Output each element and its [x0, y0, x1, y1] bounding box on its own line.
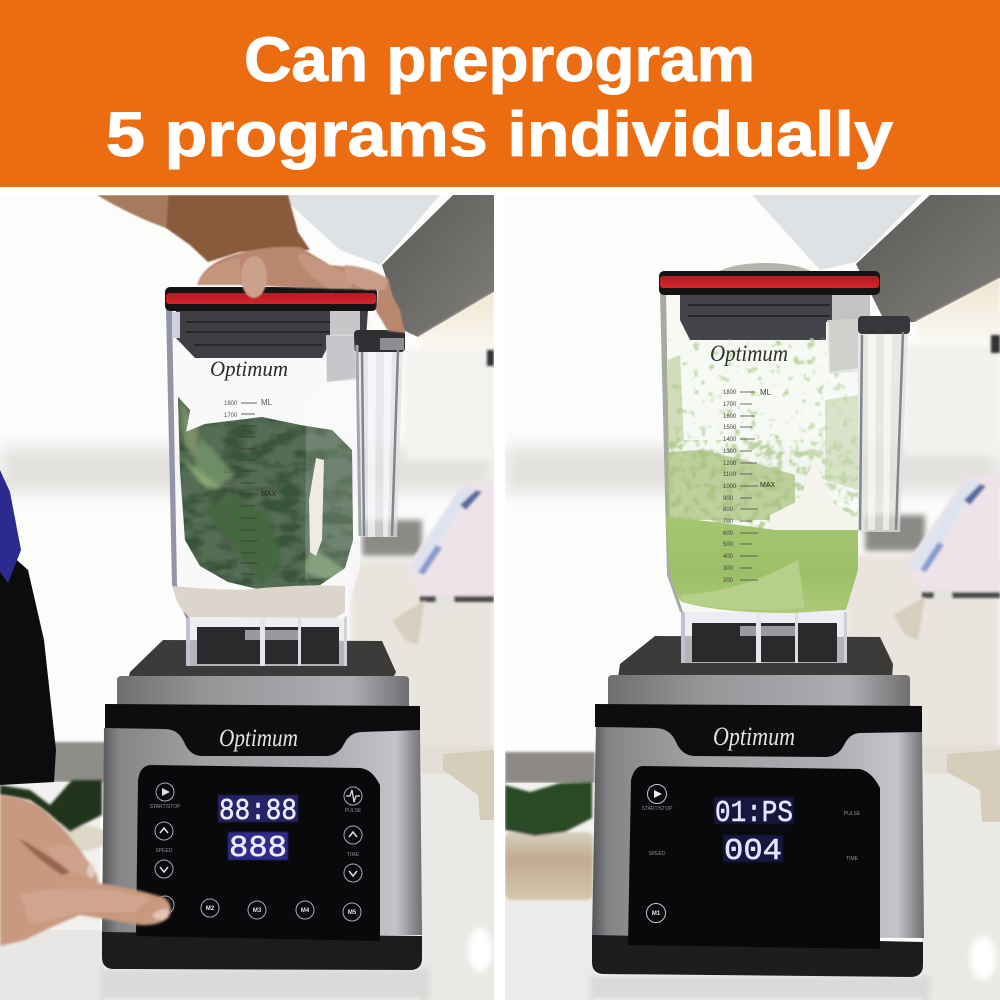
silver body [102, 728, 422, 935]
measuring scale: 1600 [723, 414, 737, 420]
green splatter [668, 338, 858, 530]
wooden board [443, 750, 494, 820]
buttons: M3 [253, 908, 262, 914]
logo on jar: Optimum [710, 341, 788, 366]
measuring scale: 1400 [723, 437, 737, 443]
jar inner corner highlight [305, 426, 353, 580]
measuring scale: MAX [760, 482, 776, 489]
display 1: 01:PS [715, 796, 793, 831]
red lid [659, 271, 880, 295]
lid cap [717, 263, 813, 272]
measuring scale: 800 [224, 516, 235, 522]
buttons [150, 783, 362, 921]
pressing hand [0, 795, 171, 946]
panel: left photo, before blending [0, 195, 494, 1000]
spinach leaves [178, 397, 353, 589]
base pad [129, 640, 396, 676]
measuring scale: 1700 [723, 402, 737, 408]
buttons: M2 [206, 906, 215, 912]
silver top [117, 676, 409, 706]
lit buttons and labels: START/STOP [642, 806, 673, 812]
display 2: 888 [229, 831, 287, 866]
measuring scale: 700 [224, 528, 235, 534]
lit buttons and labels: PULSE [844, 811, 861, 817]
measuring scale: 1800 [723, 390, 737, 396]
silver body [592, 727, 924, 938]
buttons: START/STOP [150, 804, 181, 810]
spinach plate [505, 782, 593, 900]
measuring scale: 800 [723, 507, 734, 513]
measuring scale: ML [760, 388, 772, 397]
blender: right [592, 263, 924, 977]
control base [592, 675, 924, 977]
wooden board [947, 750, 1000, 822]
jar body [165, 287, 405, 618]
jar inner corner highlight [806, 370, 858, 530]
measuring scale: ML [261, 398, 273, 407]
base pad [618, 636, 893, 678]
dark lid seal [680, 293, 870, 340]
base logo: Optimum [219, 725, 298, 752]
background appliance [392, 350, 494, 645]
measuring scale: 1200 [723, 461, 737, 467]
handle [326, 330, 405, 537]
measuring scale [224, 398, 276, 579]
lit buttons and labels: TIME [846, 856, 859, 862]
red lid [165, 287, 377, 311]
measuring scale: 1200 [224, 469, 238, 475]
kitchen background [505, 195, 1000, 1000]
measuring scale: 400 [224, 561, 235, 567]
lit buttons and labels: M1 [652, 911, 661, 917]
title: Can preprogram [244, 25, 755, 95]
buttons: M5 [348, 910, 357, 916]
header banner [0, 0, 1000, 187]
measuring scale [723, 388, 776, 584]
measuring scale: 400 [723, 554, 734, 560]
measuring scale: 300 [723, 566, 734, 572]
measuring scale: 1100 [224, 480, 238, 486]
buttons: SPEED [156, 848, 173, 854]
measuring scale: 500 [224, 552, 235, 558]
measuring scale: 1700 [224, 413, 238, 419]
measuring scale: 1400 [224, 447, 238, 453]
lit buttons and labels: SPEED [649, 851, 666, 857]
measuring scale: 600 [224, 540, 235, 546]
hand on lid [197, 247, 405, 333]
panel: right photo, after blending [505, 195, 1000, 1000]
foot [592, 935, 923, 977]
jar body [659, 263, 910, 613]
measuring scale: 200 [723, 578, 734, 584]
measuring scale: 1600 [224, 424, 238, 430]
measuring scale: 1800 [224, 401, 238, 407]
buttons: PULSE [345, 808, 362, 814]
measuring scale: 600 [723, 531, 734, 537]
black band and notch [595, 704, 922, 757]
measuring scale: 1000 [224, 492, 238, 498]
lit buttons and labels [642, 784, 861, 922]
control panel [628, 766, 880, 949]
measuring scale: 300 [224, 573, 235, 579]
milk layer [173, 585, 345, 618]
measuring scale: 1300 [224, 458, 238, 464]
title: 5 programs individually [106, 100, 893, 170]
background appliance [893, 335, 1000, 640]
measuring scale: 1100 [723, 472, 737, 478]
blender: left [0, 195, 422, 970]
buttons: TIME [347, 852, 360, 858]
measuring scale: MAX [261, 491, 276, 498]
control base [102, 676, 422, 970]
black band and notch [105, 704, 420, 756]
person torso [0, 470, 56, 785]
logo on jar: Optimum [210, 356, 288, 381]
arm [97, 195, 310, 262]
measuring scale: 700 [723, 519, 734, 525]
green liquid [666, 517, 858, 613]
kitchen background [0, 195, 494, 1000]
measuring scale: 1500 [224, 435, 238, 441]
spinach bowl [0, 780, 110, 852]
dark lid seal [172, 309, 368, 358]
measuring scale: 900 [723, 496, 734, 502]
foot [102, 932, 422, 970]
strip of reflection [309, 458, 324, 556]
display 1: 88:88 [219, 794, 297, 829]
measuring scale: 500 [723, 542, 734, 548]
handle [827, 316, 910, 532]
blade coupling [681, 611, 847, 663]
measuring scale: 900 [224, 504, 235, 510]
base logo: Optimum [713, 722, 795, 751]
measuring scale: 1000 [723, 484, 737, 490]
display 2: 004 [724, 834, 782, 869]
control panel [136, 765, 380, 941]
silver top [608, 675, 910, 708]
measuring scale: 1500 [723, 425, 737, 431]
measuring scale: 1300 [723, 449, 737, 455]
blade coupling [186, 615, 347, 666]
buttons: M4 [301, 908, 310, 914]
